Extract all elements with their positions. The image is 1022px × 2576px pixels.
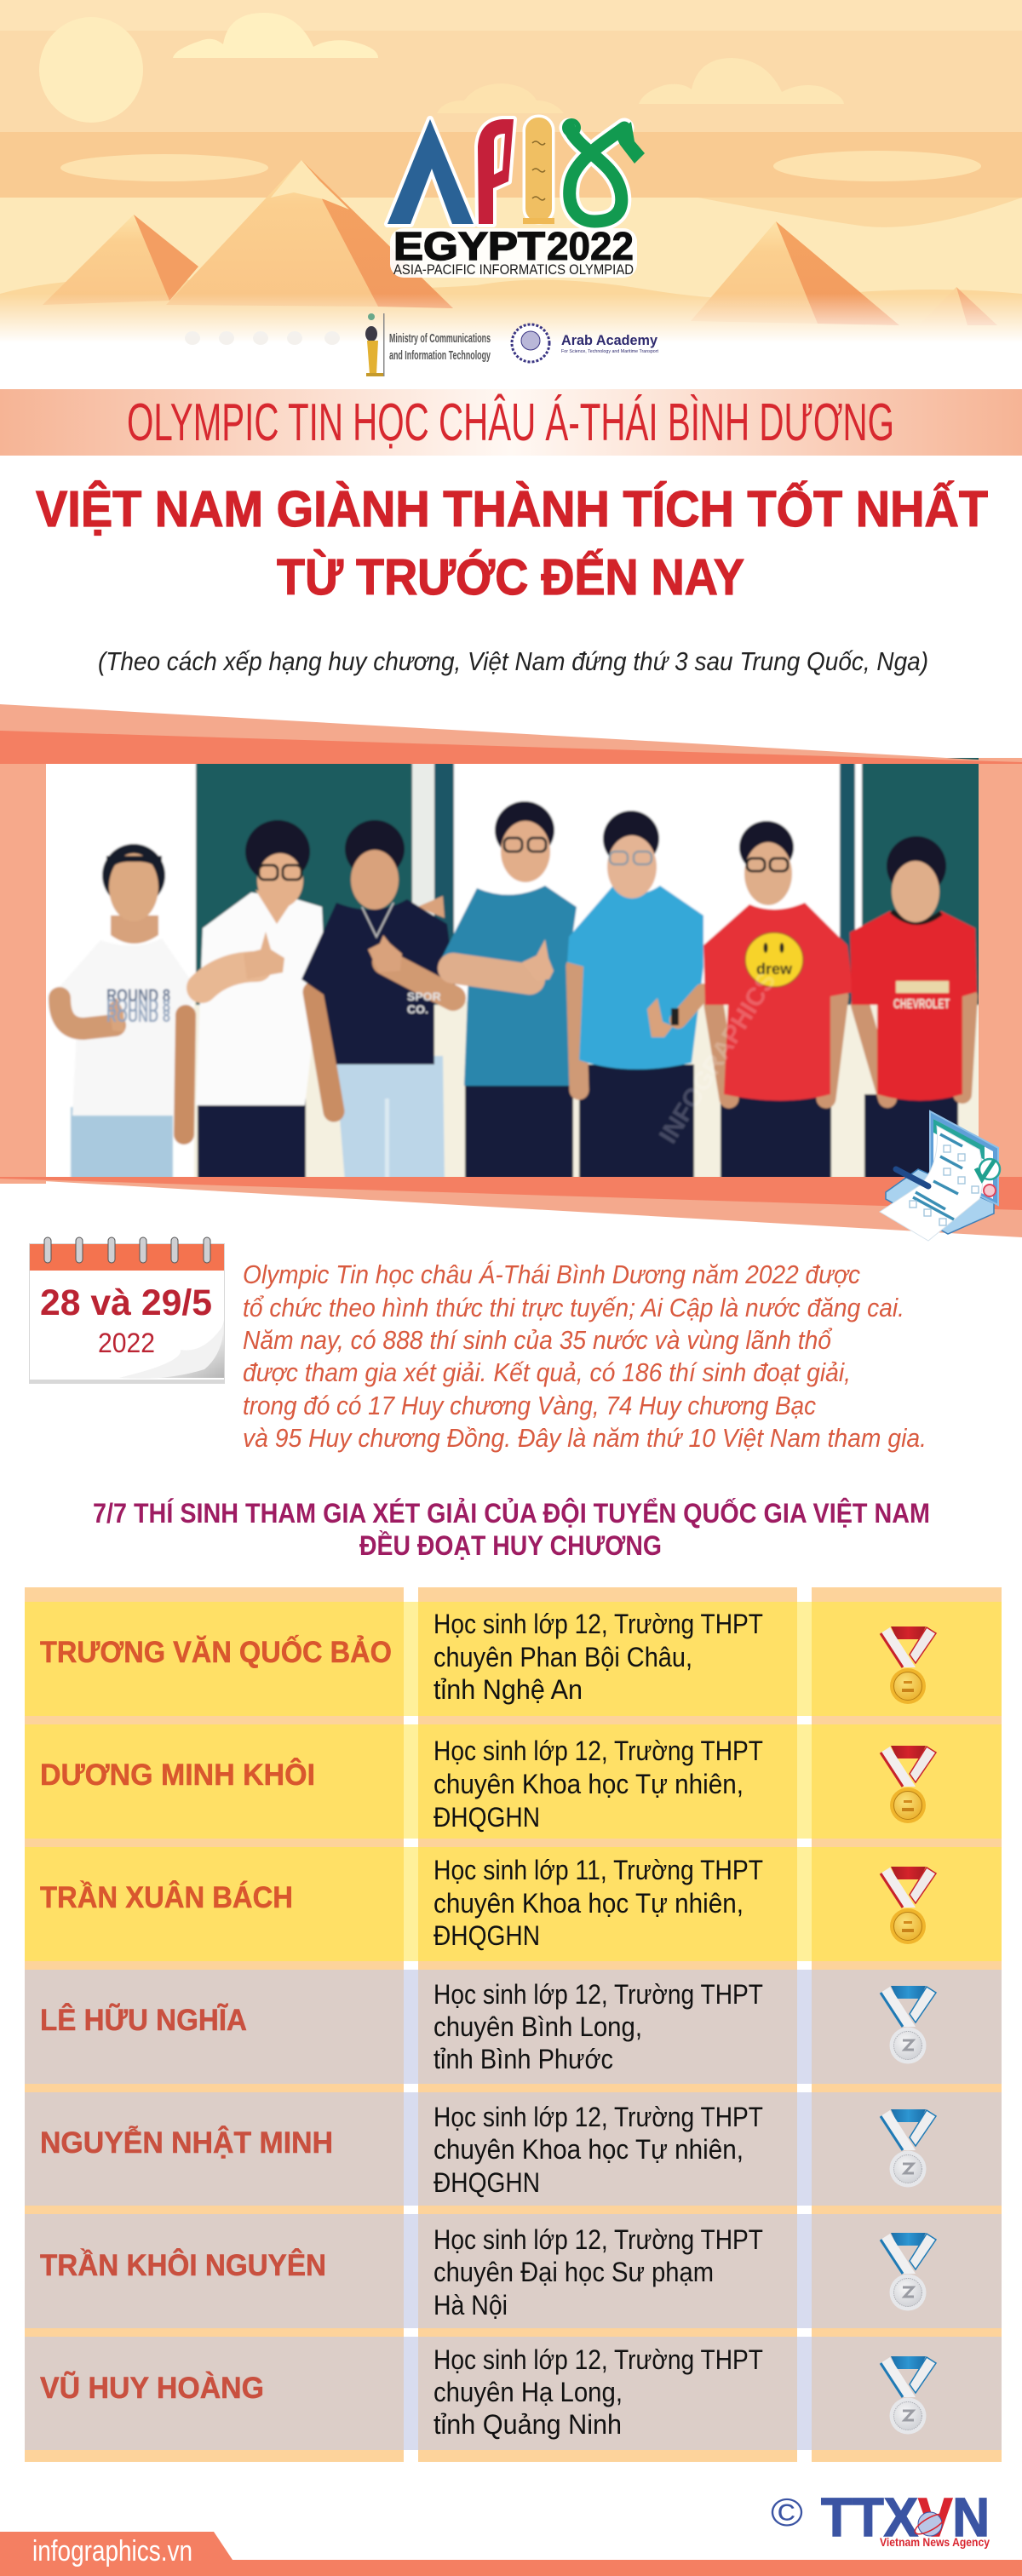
person 3: black T-shirt, light jeans <box>301 820 456 1181</box>
gold medal <box>881 1746 936 1823</box>
letter I cartouche <box>523 118 554 224</box>
pencil <box>896 1169 928 1186</box>
school: chuyên Bình Long, <box>433 2011 642 2042</box>
silver medal <box>881 2233 936 2311</box>
row 1: Trương Văn Quốc Bảo <box>40 1609 936 1705</box>
shirt print: ROUND 8 <box>106 996 170 1016</box>
year: 2022 <box>98 1328 155 1358</box>
school: Học sinh lớp 11, Trường THPT <box>433 1855 763 1885</box>
shirt print: ROUND 8 <box>106 986 170 1006</box>
school: chuyên Khoa học Tự nhiên, <box>433 1888 744 1919</box>
person 4: teal T-shirt <box>440 801 577 1181</box>
school: chuyên Hạ Long, <box>433 2377 623 2407</box>
back dune <box>698 198 1022 227</box>
organiser logos <box>365 313 659 376</box>
school: chuyên Đại học Sư phạm <box>433 2257 714 2287</box>
row 4: Lê Hữu Nghĩa <box>40 1979 936 2074</box>
pyramid left <box>43 215 198 305</box>
person 5: light blue polo <box>567 811 703 1181</box>
section heading: ĐỀU ĐOẠT HUY CHƯƠNG <box>359 1530 662 1561</box>
exam paper <box>880 1126 983 1241</box>
answer boxes <box>910 1145 979 1225</box>
name: TRƯƠNG VĂN QUỐC BẢO <box>40 1635 392 1669</box>
main title: VIỆT NAM GIÀNH THÀNH TÍCH TỐT NHẤT <box>36 480 988 537</box>
section heading: 7/7 THÍ SINH THAM GIA XÉT GIẢI CỦA ĐỘI TUYỂN QUỐC GIA VIỆT NAM <box>93 1498 930 1529</box>
row 5: Nguyễn Nhật Minh <box>40 2102 936 2198</box>
school: chuyên Khoa học Tự nhiên, <box>433 1769 744 1799</box>
school: chuyên Phan Bội Châu, <box>433 1642 692 1672</box>
school: tỉnh Nghệ An <box>433 1674 583 1705</box>
gold rows <box>25 1602 1002 1961</box>
gold medal <box>881 1867 936 1944</box>
name: TRẦN XUÂN BÁCH <box>40 1880 293 1914</box>
photo: seven team members <box>46 754 983 1181</box>
agency initials: TTXVN <box>821 2487 990 2548</box>
pyramid small <box>919 287 997 325</box>
ministry name: and Information Technology <box>389 348 491 363</box>
question lines <box>913 1134 962 1219</box>
school: chuyên Khoa học Tự nhiên, <box>433 2134 744 2165</box>
icon: pharaoh figure <box>365 313 385 376</box>
person 7: red Chevrolet jersey <box>850 836 977 1181</box>
camels <box>185 331 340 345</box>
school: ĐHQGHN <box>433 2167 540 2198</box>
top slanted band <box>0 704 1022 764</box>
name: TRẦN KHÔI NGUYÊN <box>40 2248 326 2282</box>
page curl <box>119 1320 224 1378</box>
icon: Arab Academy emblem <box>512 324 549 362</box>
side panels of photo frame <box>0 758 1022 1184</box>
school: Học sinh lớp 12, Trường THPT <box>433 1979 763 2010</box>
name: NGUYỄN NHẬT MINH <box>40 2126 333 2160</box>
school: Học sinh lớp 12, Trường THPT <box>433 2224 763 2255</box>
cloud right <box>639 58 844 104</box>
calendar header <box>30 1244 224 1271</box>
check badge <box>976 1159 1000 1179</box>
olympiad full name: ASIA-PACIFIC INFORMATICS OLYMPIAD <box>393 262 634 278</box>
photo watermark: INFOGRAPHICS <box>654 967 782 1149</box>
letter P <box>478 119 514 224</box>
icon: online exam on laptop <box>880 1111 1000 1241</box>
silver row gutters <box>404 1970 812 2450</box>
globe <box>912 2510 948 2538</box>
icon: calendar <box>29 1237 225 1384</box>
title band <box>0 389 1022 456</box>
silver medal <box>881 2109 936 2187</box>
cloud centre <box>437 83 564 113</box>
sun <box>39 17 143 123</box>
school: ĐHQGHN <box>433 1920 540 1951</box>
school: Học sinh lớp 12, Trường THPT <box>433 1736 763 1766</box>
smiley print: drew <box>756 961 793 978</box>
Arab Academy tagline: For Science, Technology and Maritime Transport <box>561 349 659 354</box>
footer bar <box>0 2532 1022 2576</box>
laptop base <box>886 1169 994 1234</box>
laptop screen <box>930 1111 998 1205</box>
orange separators <box>25 1587 1002 2462</box>
silver rows <box>25 1970 1002 2450</box>
intro paragraph: tổ chức theo hình thức thi trực tuyến; Ai Cập là nước đăng cai. <box>243 1293 904 1322</box>
sand streak right <box>773 151 981 181</box>
name: DƯƠNG MINH KHÔI <box>40 1758 315 1792</box>
bottom slanted band <box>0 1177 1022 1237</box>
shirt print: ROUND 8 <box>106 1007 170 1026</box>
sand streak left <box>60 154 268 181</box>
person 6: red T-shirt with smiley <box>703 821 853 1181</box>
white outline behind text <box>390 228 637 278</box>
cross badge <box>984 1185 996 1196</box>
shirt print: SPOR <box>407 990 441 1003</box>
school: Học sinh lớp 12, Trường THPT <box>433 2102 763 2132</box>
cloud left <box>173 13 378 58</box>
gold row gutters <box>404 1602 812 1961</box>
silver medal <box>881 2356 936 2434</box>
table background <box>25 1587 1002 2462</box>
copyright mark: © <box>771 2490 803 2534</box>
person 2: white shirt, thumb up <box>196 820 324 1181</box>
row 3: Trần Xuân Bách <box>40 1855 936 1951</box>
intro paragraph: được tham gia xét giải. Kết quả, có 186 thí sinh đoạt giải, <box>243 1357 851 1387</box>
silver medal <box>881 1986 936 2064</box>
school: tỉnh Quảng Ninh <box>433 2409 622 2440</box>
intro paragraph: Olympic Tin học châu Á-Thái Bình Dương năm 2022 được <box>243 1259 860 1289</box>
letter A <box>388 119 474 224</box>
ministry name: Ministry of Communications <box>389 331 491 346</box>
row 7: Vũ Huy Hoàng <box>40 2344 936 2440</box>
front dunes <box>0 278 1022 341</box>
school: Học sinh lớp 12, Trường THPT <box>433 1609 763 1639</box>
website: infographics.vn <box>32 2535 192 2567</box>
letter O serpent <box>565 121 645 221</box>
pyramid big <box>166 160 453 308</box>
date: 28 và 29/5 <box>40 1282 212 1323</box>
header: desert illustration <box>0 0 1022 389</box>
person 1: white T-shirt <box>51 844 202 1181</box>
logo: APIO Egypt 2022 <box>388 118 645 278</box>
pyramid right <box>691 221 899 325</box>
year: 2022 <box>547 224 634 268</box>
name: LÊ HỮU NGHĨA <box>40 2003 247 2037</box>
EGYPT: EGYPT <box>393 224 545 268</box>
name: VŨ HUY HOÀNG <box>40 2371 264 2405</box>
school: ĐHQGHN <box>433 1802 540 1833</box>
Arab Academy name: Arab Academy <box>561 332 658 348</box>
row 6: Trần Khôi Nguyên <box>40 2224 936 2321</box>
school: tỉnh Bình Phước <box>433 2044 613 2074</box>
intro paragraph: và 95 Huy chương Đồng. Đây là năm thứ 10 Việt Nam tham gia. <box>243 1423 927 1453</box>
TTXVN logo <box>771 2487 990 2549</box>
shirt print: CO. <box>407 1002 428 1016</box>
school: Học sinh lớp 12, Trường THPT <box>433 2344 763 2375</box>
agency name: Vietnam News Agency <box>880 2535 990 2549</box>
gold medal <box>881 1626 936 1704</box>
sponsor print: CHEVROLET <box>893 997 950 1012</box>
intro paragraph: trong đó có 17 Huy chương Vàng, 74 Huy chương Bạc <box>243 1391 816 1420</box>
binding rings <box>44 1237 210 1263</box>
smiley print <box>745 932 803 987</box>
intro paragraph: Năm nay, có 888 thí sinh của 35 nước và vùng lãnh thổ <box>243 1325 833 1355</box>
main title: TỪ TRƯỚC ĐẾN NAY <box>277 549 744 605</box>
row 2: Dương Minh Khôi <box>40 1736 936 1833</box>
school: Hà Nội <box>433 2290 508 2321</box>
subtitle: (Theo cách xếp hạng huy chương, Việt Nam đứng thứ 3 sau Trung Quốc, Nga) <box>98 646 928 676</box>
